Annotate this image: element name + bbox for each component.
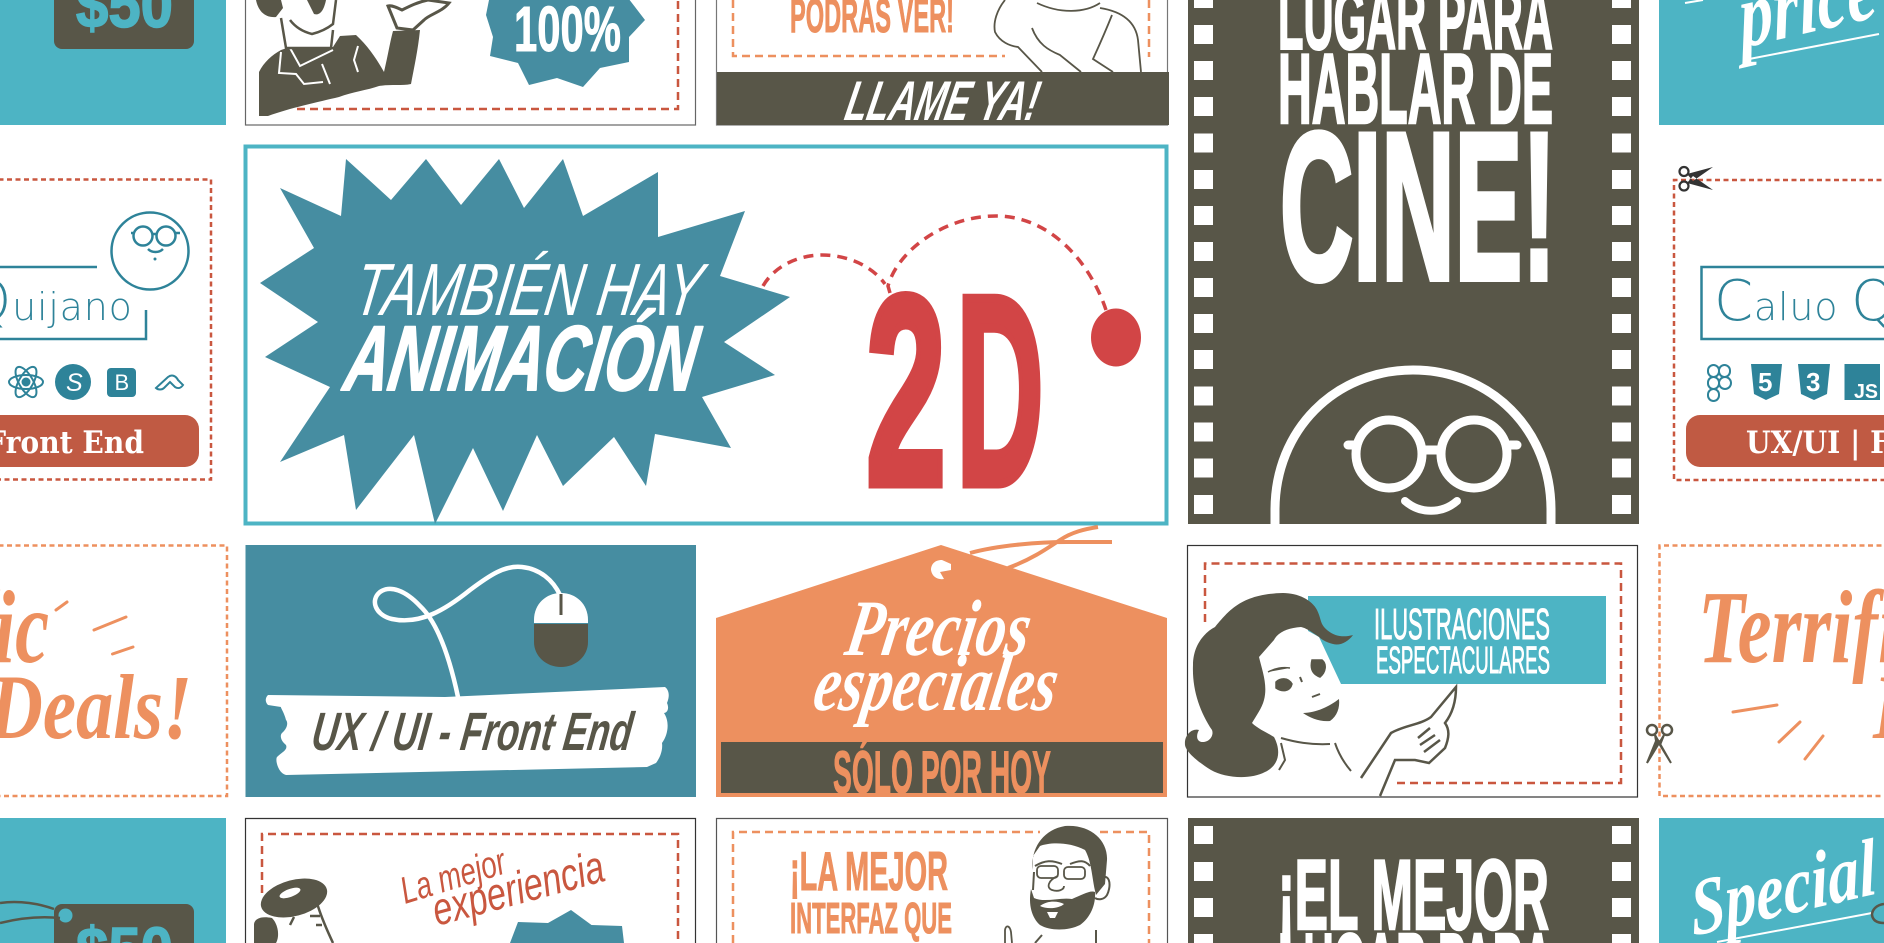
footer bar — [717, 72, 1169, 125]
footer text: LLAME YA! — [840, 70, 1046, 132]
panel: film strip main — [1188, 0, 1639, 524]
icon: html5: 5 — [1758, 367, 1772, 397]
film perforations — [1194, 0, 1631, 514]
label text — [1374, 600, 1550, 682]
tag body — [716, 545, 1167, 797]
panel: ilustraciones card: ESPECTACULARES — [1376, 640, 1550, 682]
panel: special price top right — [1659, 0, 1884, 125]
illustration: man with hat — [254, 872, 333, 943]
tag hole — [58, 908, 72, 922]
icon: face with glasses — [1275, 370, 1551, 524]
burst text: animacion: ANIMACIÓN — [338, 307, 707, 410]
panel: llame ya card — [716, 0, 1169, 132]
bounce path arrow — [763, 216, 1106, 310]
panel: main animation banner — [246, 146, 1166, 542]
heading text — [790, 840, 952, 943]
panel: price tag bottom left — [0, 818, 226, 943]
role pill — [1686, 415, 1884, 467]
panel: terrific deals left part — [0, 546, 227, 796]
logo frame — [0, 267, 146, 339]
teal label box — [1308, 596, 1606, 684]
script text: la mejor: La mejor — [395, 841, 512, 913]
panel: terrific deals right part — [1647, 546, 1884, 796]
footer bar — [721, 742, 1163, 793]
price tag label — [54, 904, 194, 943]
banner text: UX / UI - Front End — [308, 702, 638, 762]
logo frame — [1702, 267, 1884, 339]
panel: precios especiales tag: SÓLO POR HOY — [833, 739, 1051, 806]
film text — [1278, 839, 1553, 943]
panel: film strip main: HABLAR DE — [1278, 33, 1553, 144]
icon: tailwind mark — [156, 376, 183, 390]
script text: precios: Precios — [839, 585, 1038, 673]
burst shape — [260, 159, 790, 524]
role pill — [0, 415, 199, 467]
panel: ilustraciones card: ILUSTRACIONES — [1374, 600, 1550, 649]
script text: experiencia: experiencia — [426, 840, 610, 936]
tag hole — [931, 560, 951, 579]
panel: la mejor experiencia card — [246, 818, 696, 943]
illustration: woman pointing — [1185, 593, 1456, 796]
film text — [1278, 0, 1556, 324]
heading text: INTERFAZ QUE — [790, 894, 952, 943]
tag string — [970, 527, 1112, 568]
panel: 100 percent card top — [246, 0, 696, 125]
icon: css3 — [1798, 364, 1830, 400]
burst text: tambien hay: TAMBIÉN HAY — [349, 248, 712, 331]
big text: 2D: 2 — [866, 241, 946, 542]
spark marks — [56, 602, 133, 654]
panel: la mejor interfaz card — [716, 818, 1168, 943]
icon: js: JS — [1854, 381, 1878, 403]
panel: film strip bottom — [1188, 818, 1639, 943]
panel: precios especiales tag — [716, 527, 1167, 806]
badge star — [510, 910, 624, 943]
tag string loop — [1872, 904, 1884, 923]
illustration: man presenting — [256, 0, 449, 116]
icon: sass: S — [66, 369, 83, 397]
logo face icon — [112, 212, 188, 290]
icon: react — [9, 364, 43, 400]
spark marks — [1733, 705, 1823, 759]
icon: js — [1844, 364, 1880, 403]
heading text: ¡LA MEJOR — [790, 840, 948, 902]
panel: ilustraciones card — [1185, 546, 1638, 797]
icon: bootstrap — [107, 368, 136, 397]
script text: especiales: especiales — [808, 640, 1065, 728]
illustration: bearded man — [1005, 826, 1110, 943]
mouse cable — [375, 567, 560, 697]
bouncing ball — [1091, 308, 1141, 366]
film perforations — [1194, 826, 1631, 943]
panel: caluo quijano card left part — [0, 180, 211, 480]
icon: bootstrap: B — [114, 370, 129, 395]
icon: scissors top — [1680, 167, 1713, 190]
torn paper banner — [266, 687, 669, 775]
panel: ux ui front end — [246, 545, 696, 797]
panel: caluo quijano card right part — [1674, 167, 1884, 480]
icon: html5 — [1751, 364, 1782, 400]
illustration: hand and shirt — [994, 0, 1141, 72]
icon: scissors — [1647, 725, 1672, 763]
icon: figma — [1708, 365, 1731, 401]
panel: special price bottom right — [1659, 818, 1884, 943]
icon: mouse — [534, 593, 588, 667]
tag string — [0, 902, 60, 923]
panel: film strip main: CINE! — [1280, 89, 1556, 324]
icon: sass — [55, 364, 91, 400]
price tag label — [54, 0, 194, 49]
panel: main animation banner: D — [956, 241, 1044, 542]
icon: css3: 3 — [1806, 367, 1820, 397]
badge: 100 percent star — [486, 0, 645, 87]
panel: price tag top left — [0, 0, 226, 125]
